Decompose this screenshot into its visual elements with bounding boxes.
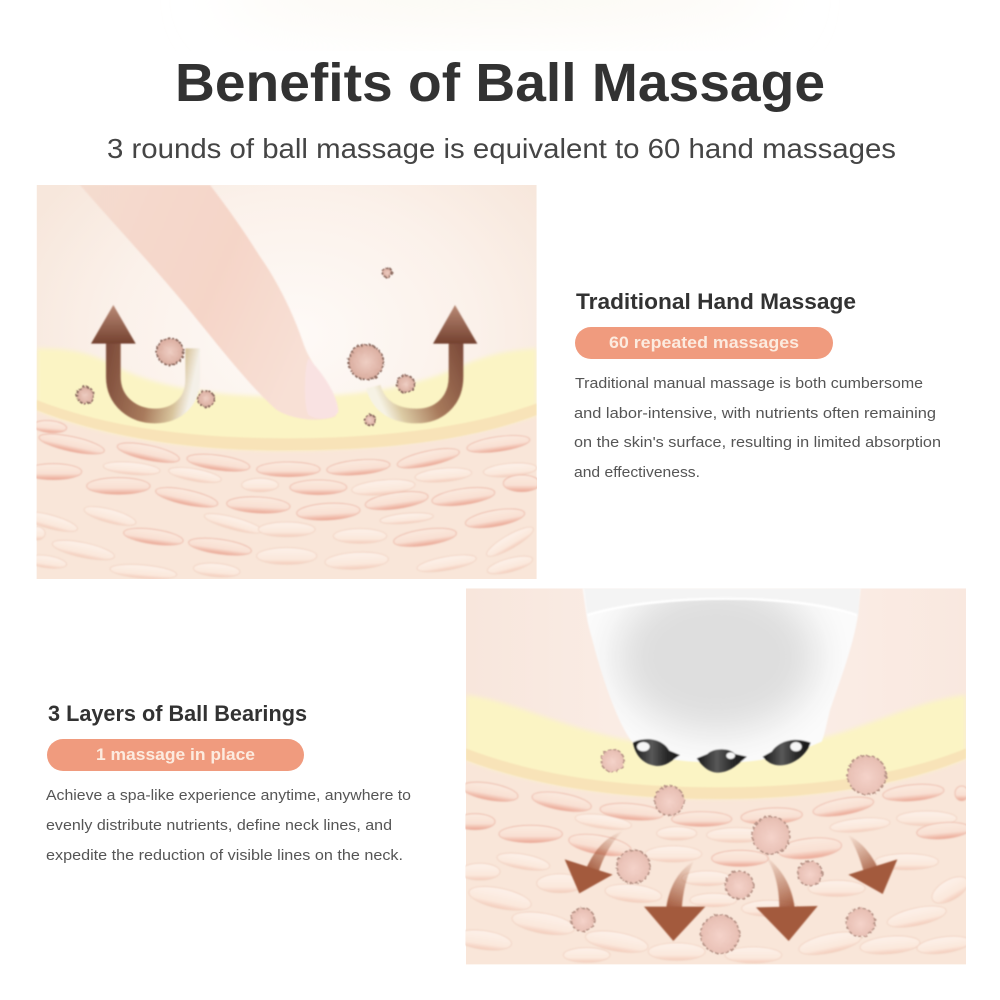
pill: 1 massage in place: 1 massage in place [96, 745, 255, 764]
panel: traditional hand massage illustration [21, 185, 540, 581]
icon: steel ball right [763, 740, 811, 765]
pill: 60 repeated massages: 60 repeated massages [609, 333, 799, 352]
heading: 3 layers of ball bearings: 3 Layers of Ball Bearings [48, 701, 307, 726]
pill: 1 massage in place [47, 739, 304, 771]
body text: traditional massage description: and effectiveness. [574, 464, 700, 481]
skin: lower fat band [37, 400, 537, 451]
body text: ball bearings description: Achieve a spa-like experience anytime, anywhere to [46, 787, 411, 804]
icon: steel ball left [633, 739, 680, 766]
heading: traditional hand massage: Traditional Hand Massage [576, 289, 856, 314]
icon: steel ball centre [697, 749, 747, 773]
icon: fingernail [305, 358, 338, 418]
body text: traditional massage description: Traditional manual massage is both cumbersome [575, 375, 923, 392]
skin: yellow fat layer [466, 695, 966, 798]
arrow: centre right down arrow [756, 857, 818, 941]
skin: dermis layer [37, 410, 537, 579]
icon: massager device [583, 580, 861, 773]
arrow: far left down arrow [565, 831, 623, 893]
text block: ball bearings [46, 701, 411, 864]
text block: traditional hand massage [574, 289, 941, 481]
arrow: left curved up arrow [91, 305, 193, 416]
title: Benefits of Ball Massage [175, 53, 825, 113]
body text: ball bearings description [46, 787, 411, 864]
panel: ball massage illustration [454, 580, 972, 964]
arrow: far right down arrow [848, 835, 897, 894]
pill: 60 repeated massages [575, 327, 833, 359]
subtitle: 3 rounds of ball massage is equivalent to 60 hand massages [107, 133, 896, 164]
body text: ball bearings description: evenly distribute nutrients, define neck lines, and [46, 817, 392, 834]
arrow: right curved up arrow [373, 305, 477, 416]
skin: lower fat band [466, 748, 966, 799]
nutrient particles [77, 268, 414, 425]
body text: traditional massage description [574, 375, 941, 481]
icon: finger pressing skin [80, 185, 338, 420]
skin: dermis layer [466, 778, 966, 964]
body text: traditional massage description: and labor-intensive, with nutrients often remaining [574, 405, 936, 422]
body text: ball bearings description: expedite the reduction of visible lines on the neck. [46, 847, 403, 864]
skin cells [454, 779, 972, 963]
nutrient particles [571, 749, 886, 953]
arrow: centre left down arrow [644, 862, 705, 941]
skin: yellow fat layer [37, 348, 537, 450]
body text: traditional massage description: on the skin's surface, resulting in limited absorption [574, 434, 941, 451]
skin cells [21, 419, 540, 581]
